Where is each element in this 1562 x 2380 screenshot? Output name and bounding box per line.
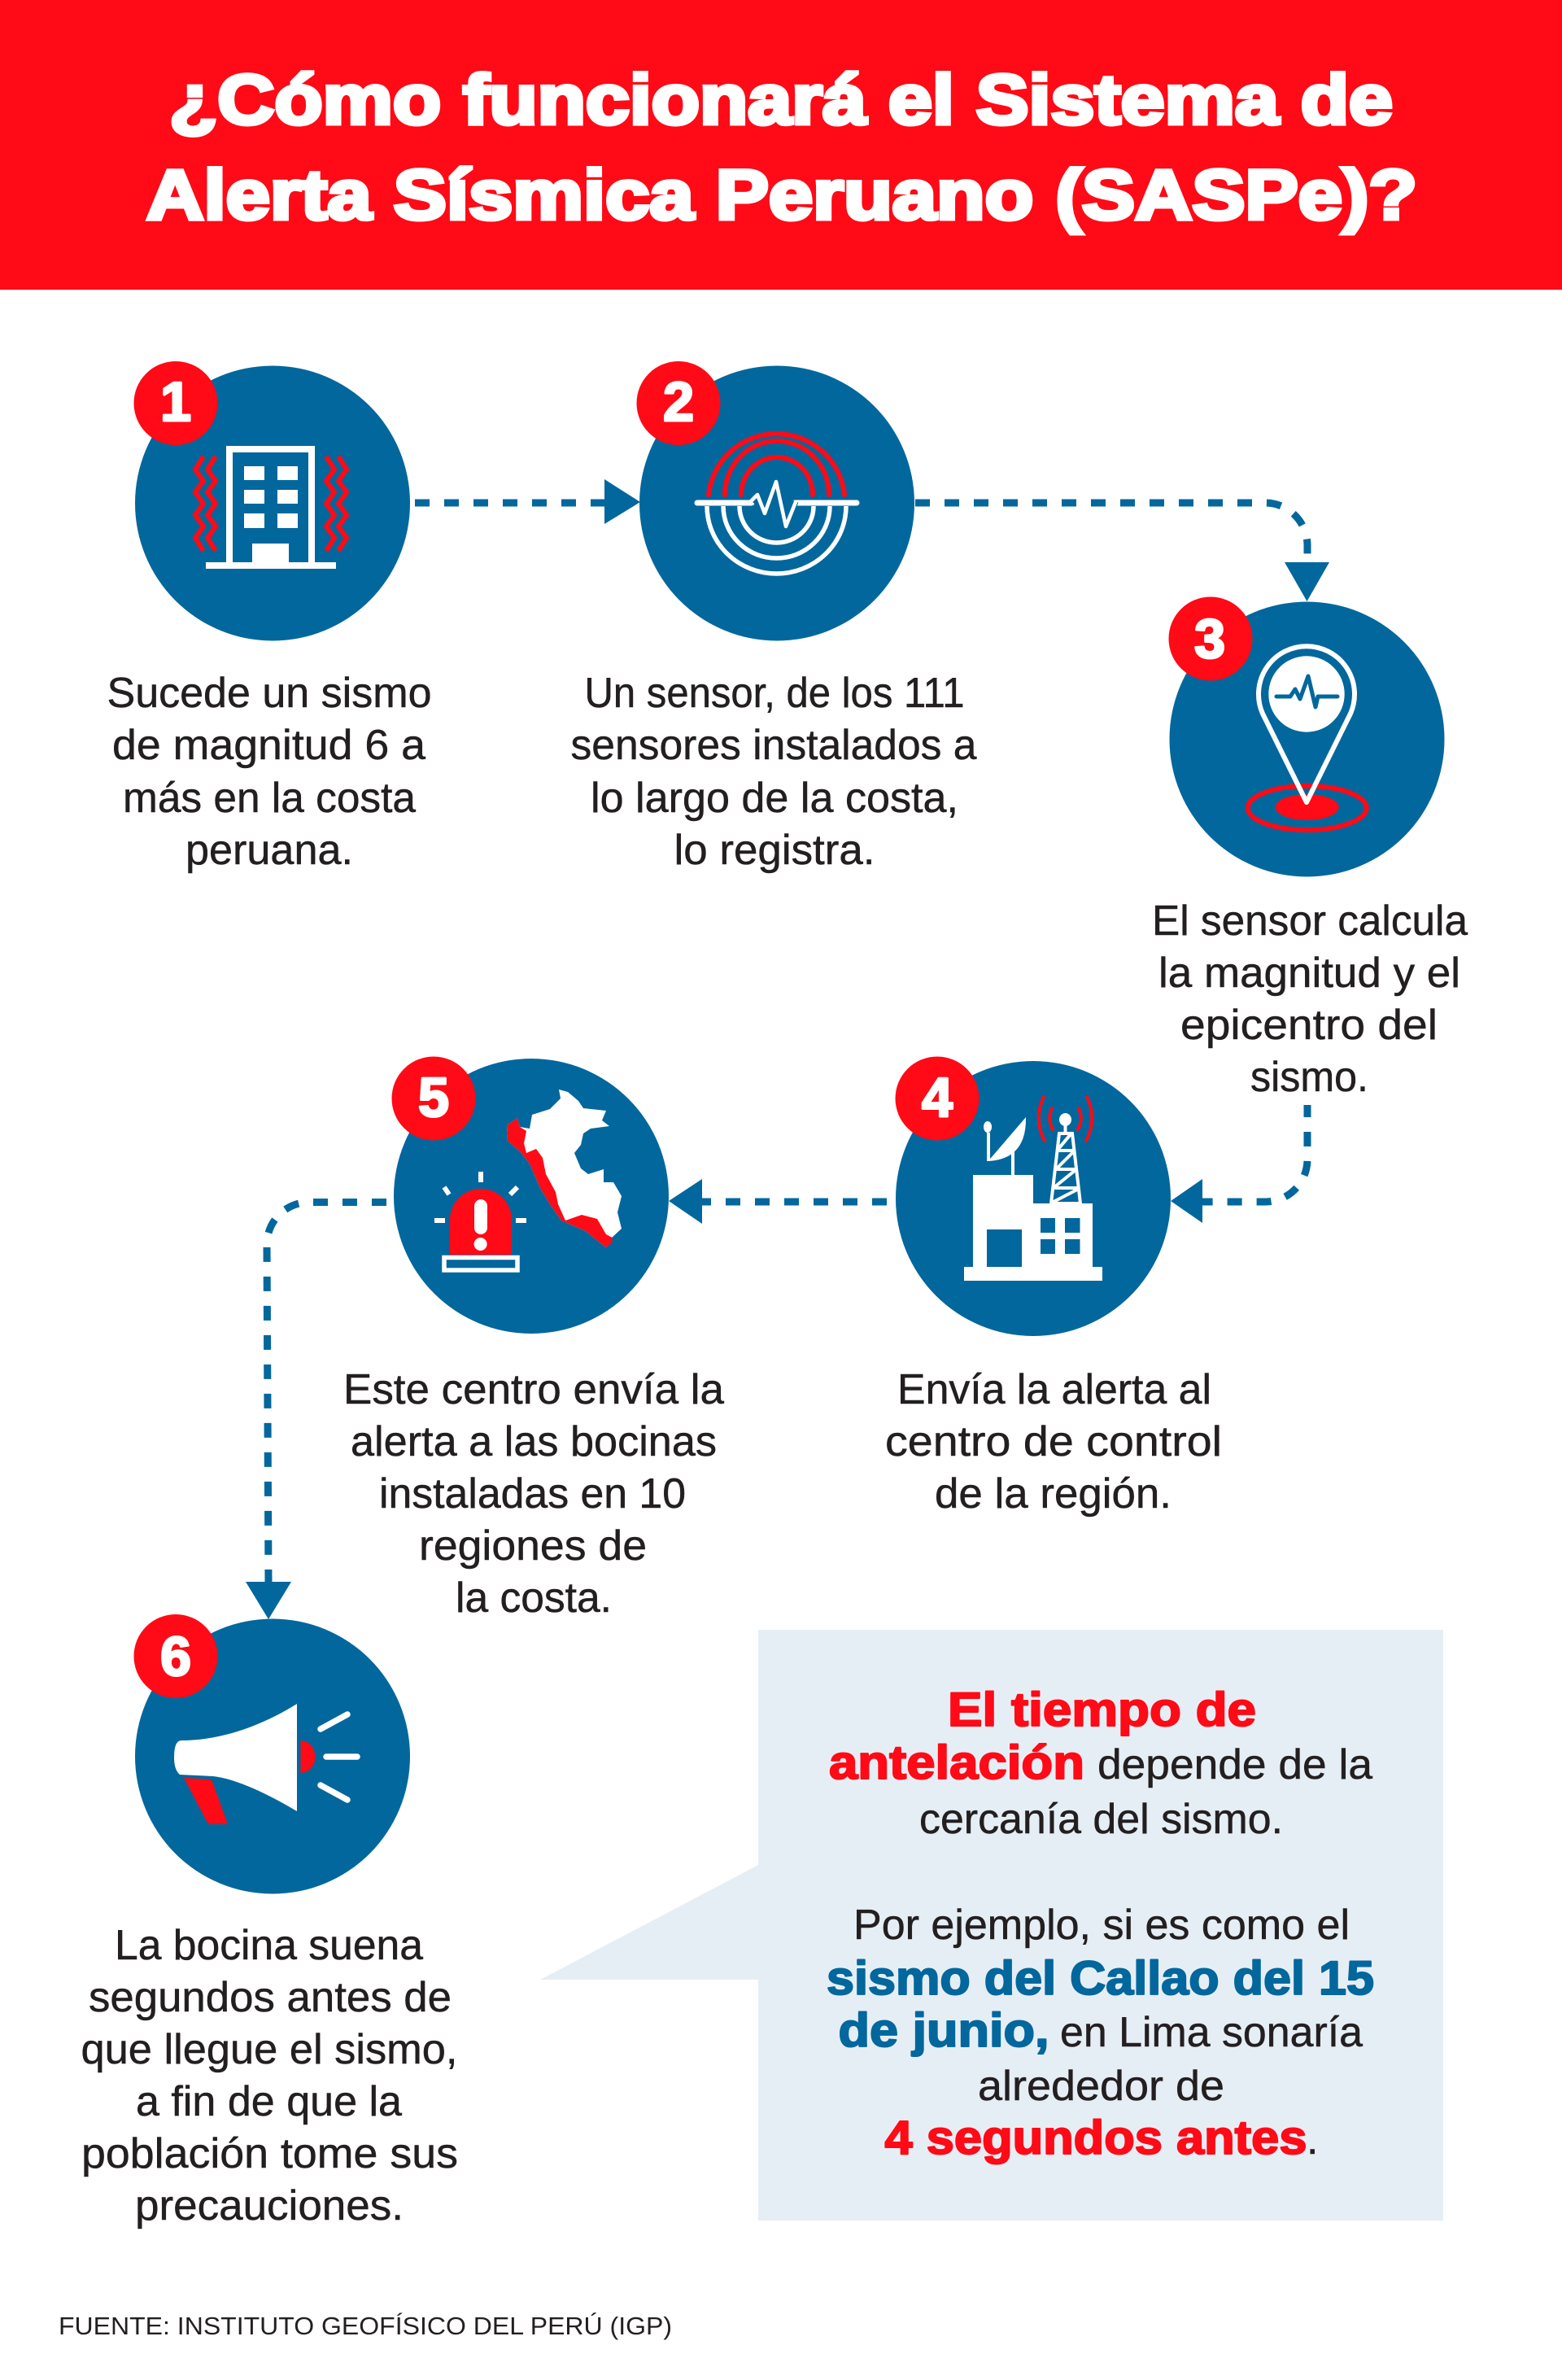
step 4 text: de la región. bbox=[935, 1470, 1172, 1518]
step 2 text: lo registra. bbox=[674, 827, 875, 874]
title bbox=[146, 61, 1417, 234]
step 3 text: la magnitud y el bbox=[1158, 950, 1460, 997]
icon: location pin with epicentre bbox=[1248, 646, 1367, 830]
icon: alarm siren bbox=[434, 1172, 526, 1270]
step 4 text: Envía la alerta al bbox=[897, 1366, 1211, 1413]
callout text: lead time: cercanía del sismo. bbox=[919, 1796, 1283, 1843]
callout text: lead time: El tiempo de bbox=[948, 1683, 1256, 1736]
callout text: example: alrededor de bbox=[978, 2063, 1224, 2110]
step 2 text: sensores instalados a bbox=[571, 722, 977, 769]
step 2 badge: 2 bbox=[663, 371, 694, 433]
step 1 text: Sucede un sismo bbox=[107, 670, 431, 717]
callout text: example: 4 segundos antes bbox=[885, 2111, 1307, 2164]
step 5 circle bbox=[394, 1059, 669, 1334]
step 3 text: El sensor calcula bbox=[1152, 897, 1468, 945]
panel: step 4 bbox=[885, 1056, 1222, 1518]
step 3 circle bbox=[1170, 602, 1445, 877]
callout text: example: . bbox=[1307, 2116, 1318, 2164]
step 6 circle bbox=[135, 1619, 410, 1894]
arrow: step 5 to 6 bbox=[246, 1202, 386, 1619]
step 5 text: alerta a las bocinas bbox=[351, 1418, 717, 1465]
step 2 text: lo largo de la costa, bbox=[591, 775, 958, 822]
step 1 circle bbox=[135, 366, 410, 641]
step 5 badge bbox=[392, 1056, 475, 1141]
step 5 text: Este centro envía la bbox=[343, 1366, 724, 1413]
step 2 text: Un sensor, de los 111 bbox=[584, 670, 965, 717]
step 3 text bbox=[1152, 897, 1468, 1101]
callout text: lead time: depende de la bbox=[1097, 1741, 1372, 1788]
step 6 text: La bocina suena bbox=[115, 1922, 423, 1969]
step 1 text: peruana. bbox=[185, 827, 353, 874]
callout text: lead time bbox=[829, 1683, 1372, 1843]
step 6 text: precauciones. bbox=[135, 2182, 404, 2229]
step 6 text: que llegue el sismo, bbox=[81, 2026, 457, 2073]
step 4 badge: 4 bbox=[922, 1067, 953, 1129]
step 4 text bbox=[885, 1366, 1222, 1518]
callout text: example bbox=[827, 1902, 1374, 2164]
step 4 text: centro de control bbox=[885, 1418, 1222, 1465]
step 2 badge bbox=[636, 361, 721, 445]
step 3 text: sismo. bbox=[1250, 1054, 1368, 1101]
step 4 circle bbox=[896, 1061, 1171, 1336]
step 2 circle bbox=[639, 366, 914, 641]
panel: step 3 bbox=[1152, 597, 1468, 1101]
step 4 badge bbox=[895, 1056, 980, 1141]
step 5 text bbox=[343, 1366, 724, 1622]
callout text: example: Por ejemplo, si es como el bbox=[853, 1902, 1350, 1949]
step 2 text bbox=[571, 670, 977, 874]
step 5 text: la costa. bbox=[456, 1574, 612, 1622]
callout text: example: de junio, bbox=[838, 2004, 1049, 2057]
callout text: example: en Lima sonaría bbox=[1060, 2009, 1363, 2056]
callout: warning time bbox=[540, 1630, 1443, 2221]
step 1 text bbox=[107, 670, 431, 874]
callout text: lead time: antelación bbox=[829, 1736, 1084, 1789]
step 6 text: población tome sus bbox=[81, 2130, 458, 2177]
header banner bbox=[0, 0, 1562, 290]
icon: seismic sensor bbox=[697, 434, 857, 574]
arrow: step 2 to 3 bbox=[915, 503, 1329, 601]
step 3 badge: 3 bbox=[1194, 608, 1225, 670]
icon: control centre with antenna bbox=[964, 1097, 1102, 1281]
panel: step 5 bbox=[343, 1056, 724, 1622]
title: Alerta Sísmica Peruano (SASPe)? bbox=[146, 156, 1417, 234]
arrow: step 1 to 2 bbox=[415, 479, 640, 524]
step 6 text: a fin de que la bbox=[136, 2078, 402, 2125]
panel: step 6 bbox=[81, 1614, 458, 2229]
panel: step 1 bbox=[107, 361, 431, 874]
step 1 text: más en la costa bbox=[123, 775, 416, 822]
step 1 badge bbox=[133, 361, 218, 445]
step 1 badge: 1 bbox=[160, 371, 191, 433]
step 5 text: regiones de bbox=[419, 1522, 647, 1570]
step 6 text bbox=[81, 1922, 458, 2229]
icon: megaphone bbox=[174, 1704, 357, 1824]
callout text: example: sismo del Callao del 15 bbox=[827, 1952, 1374, 2005]
source line: FUENTE: INSTITUTO GEOFÍSICO DEL PERÚ (IGP) bbox=[59, 2312, 672, 2340]
step 1 text: de magnitud 6 a bbox=[112, 722, 425, 769]
callout speech bubble bbox=[540, 1630, 1443, 2221]
arrow: step 3 to 4 bbox=[1171, 1105, 1307, 1223]
step 5 badge: 5 bbox=[418, 1067, 449, 1129]
step 3 text: epicentro del bbox=[1180, 1002, 1438, 1049]
arrow: step 4 to 5 bbox=[669, 1179, 887, 1224]
icon: shaking building bbox=[195, 449, 347, 569]
step 6 badge: 6 bbox=[160, 1626, 191, 1688]
step 3 badge bbox=[1168, 597, 1253, 680]
step 6 text: segundos antes de bbox=[89, 1974, 452, 2021]
panel: step 2 bbox=[571, 361, 977, 874]
step 6 badge bbox=[133, 1614, 218, 1698]
title: ¿Cómo funcionará el Sistema de bbox=[169, 61, 1393, 139]
icon: Peru map bbox=[507, 1090, 622, 1247]
step 5 text: instaladas en 10 bbox=[379, 1470, 686, 1518]
